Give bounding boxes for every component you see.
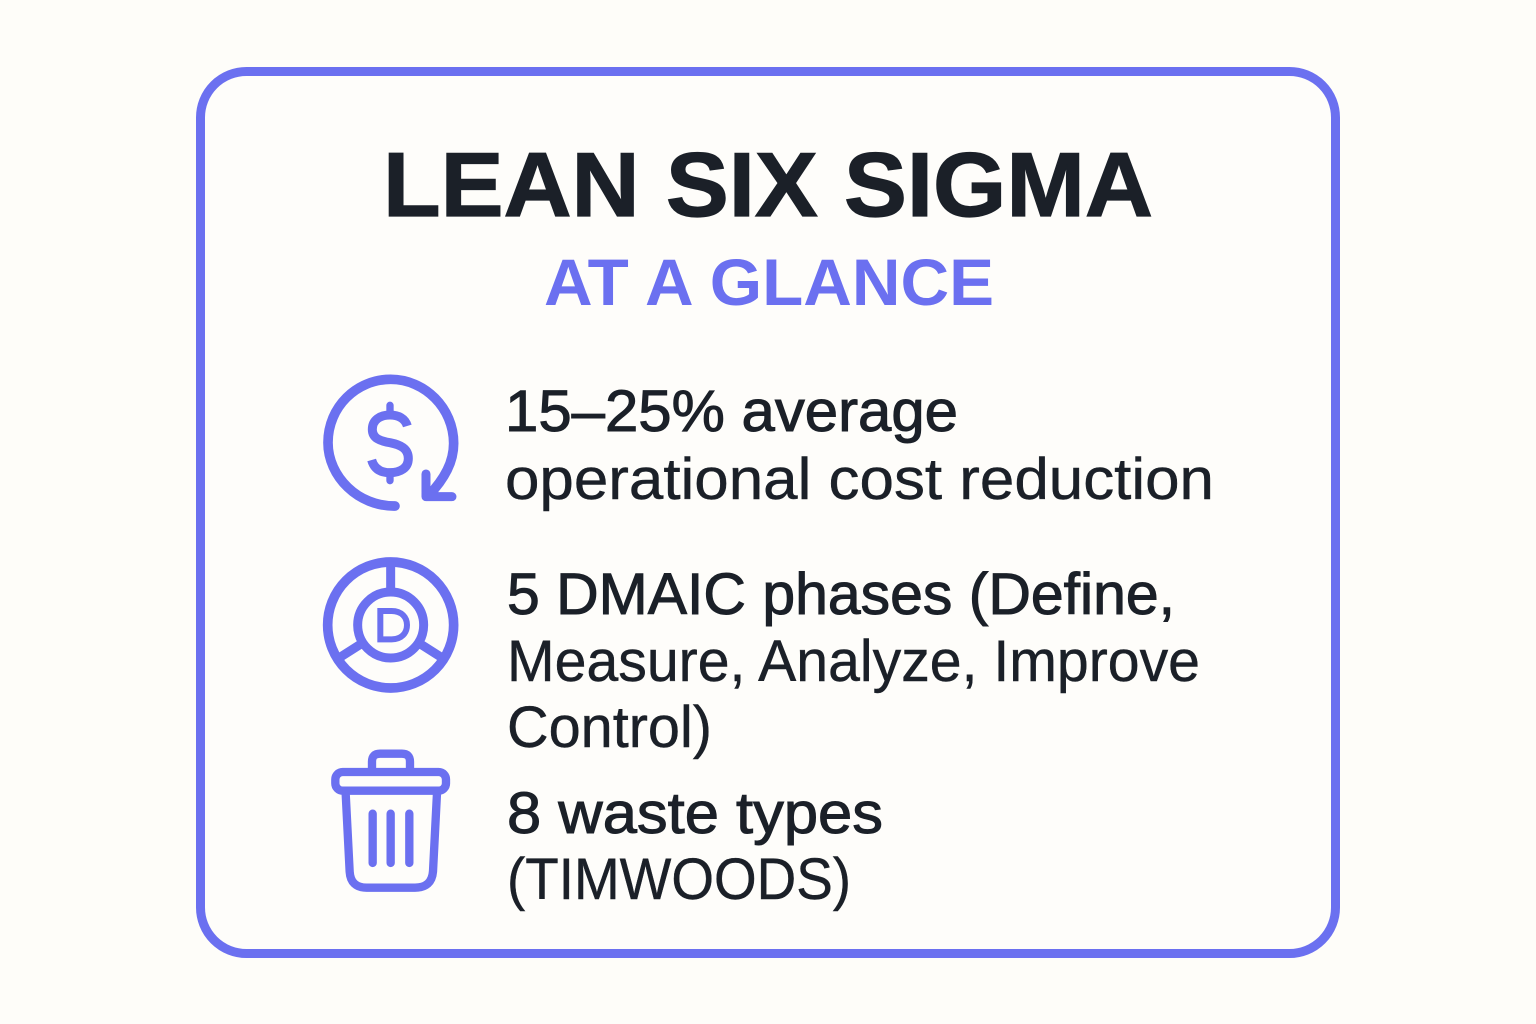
text: waste types [507, 781, 883, 912]
subtitle: AT A GLANCE [544, 245, 994, 319]
text: DMAIC phases [507, 562, 1200, 760]
icon: waste bin [335, 754, 446, 888]
text: DMAIC phases: Control) [507, 695, 712, 760]
panel: card outline [200, 72, 1336, 954]
title: LEAN SIX SIGMA [383, 135, 1153, 236]
text: DMAIC phases: 5 DMAIC phases (Define, [507, 562, 1175, 627]
text: cost reduction: 15–25% average [505, 379, 958, 444]
icon: DMAIC wheel [328, 562, 454, 688]
text: waste types: (TIMWOODS) [507, 847, 851, 912]
text: DMAIC phases: Measure, Analyze, Improve [507, 629, 1200, 694]
text: waste types: 8 waste types [507, 781, 883, 846]
text: cost reduction: operational cost reduction [505, 447, 1214, 512]
icon: dollar with circular arrow [328, 379, 454, 506]
text: cost reduction [505, 379, 1214, 512]
